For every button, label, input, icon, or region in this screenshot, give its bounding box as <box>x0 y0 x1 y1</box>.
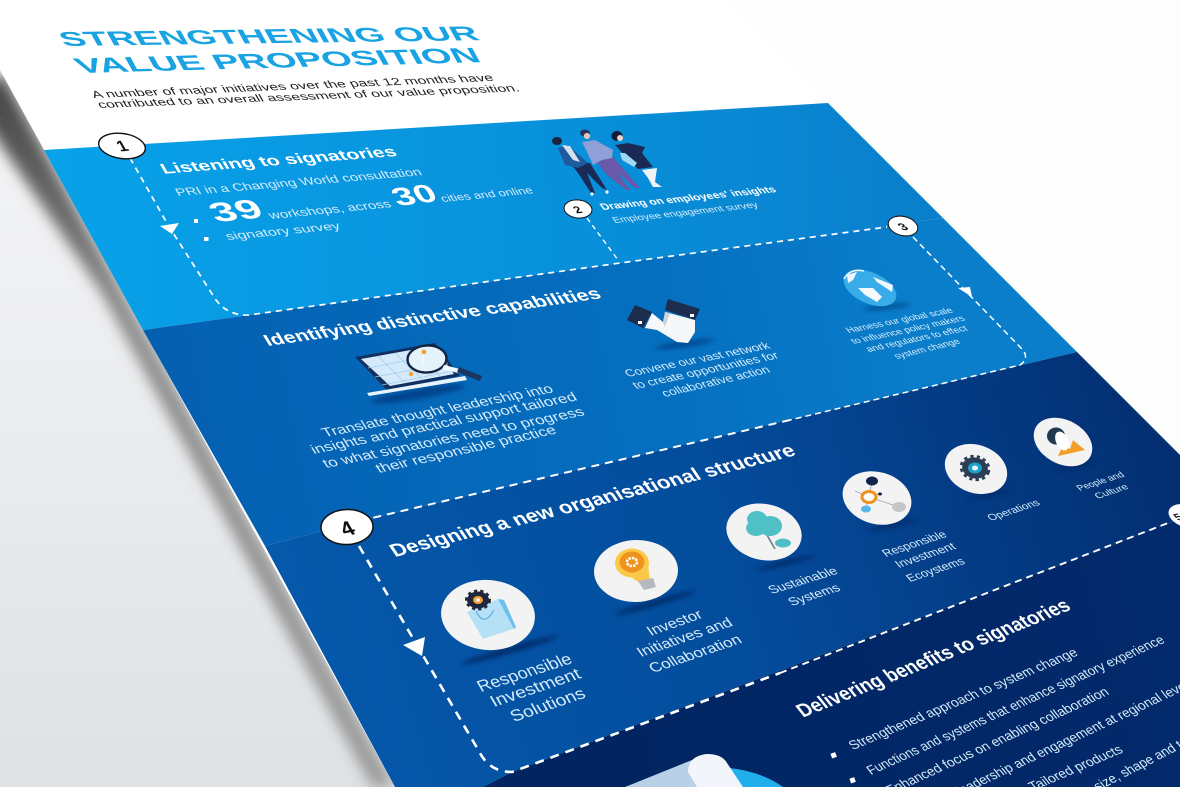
icon: globe <box>838 262 911 314</box>
unit: sustainable systems: Systems <box>785 581 844 608</box>
text block: translate thought leadership <box>307 381 587 476</box>
text block: convene our vast network <box>621 339 782 399</box>
icon: handshake <box>627 299 715 351</box>
unit: responsible investment ecosystems: Investment <box>892 540 959 570</box>
dashed connector: step 3 to 4 left <box>372 420 790 518</box>
arrow head 1 <box>160 223 179 234</box>
unit: sustainable systems: Sustainable <box>765 564 841 596</box>
title <box>54 22 485 78</box>
band: navy organisational structure panel <box>265 352 1180 787</box>
intro text: contributed to an overall assessment of our value proposition. <box>96 83 522 111</box>
unit: people and culture: People and <box>1074 471 1127 493</box>
step badge 1 <box>97 130 147 162</box>
band: mid blue capabilities panel <box>143 218 1077 546</box>
unit: people and culture <box>1025 408 1132 501</box>
text block: translate thought leadership: their responsible practice <box>372 422 559 476</box>
text block: delivering benefits to signatories: Strengthened approach to system change <box>845 645 1081 752</box>
unit: responsible investment solutions <box>438 576 589 725</box>
text block: listening to signatories: Listening to signatories <box>157 144 400 177</box>
unit: responsible investment ecosystems <box>836 463 968 584</box>
dashed connector: step 4 to 5 <box>780 523 1168 673</box>
band: light blue listening panel <box>44 103 943 330</box>
text block: delivering benefits to signatories: Delivering benefits to signatories <box>792 595 1075 722</box>
text block: convene our vast network: collaborative action <box>658 363 773 399</box>
text block: translate thought leadership: to what signatories need to progress <box>319 404 587 471</box>
unit: investor initiatives and collaboration <box>593 539 745 676</box>
step badge 4: 4 <box>335 516 360 541</box>
text block: translate thought leadership: Translate thought leadership into <box>318 381 556 440</box>
text block: harness our global scale: system change <box>892 337 964 361</box>
step badge 3: 3 <box>894 221 912 233</box>
text block: harness our global scale: Harness our global scale <box>844 306 956 335</box>
text block: drawing on employees' insights: Employee engagement survey <box>610 201 761 225</box>
arrow head 4 <box>403 637 425 656</box>
text block: drawing on employees' insights: Drawing on employees' insights <box>598 185 779 212</box>
paper drop shadow <box>0 72 395 787</box>
text block: harness our global scale: to influence policy makers <box>849 314 968 346</box>
text block: listening to signatories: PRI in a Changing World consultation <box>173 166 425 199</box>
unit: operations <box>938 436 1043 523</box>
step badge 2: 2 <box>570 204 585 216</box>
intro text: A number of major initiatives over the past 12 months have <box>90 73 496 101</box>
icon: laptop with magnifier <box>355 343 482 407</box>
unit: responsible investment solutions: Investment <box>486 665 585 710</box>
heading: identifying distinctive capabilities: Identifying distinctive capabilities <box>260 284 605 349</box>
unit: responsible investment solutions: Solutions <box>506 684 589 725</box>
text block: listening to signatories: signatory survey <box>223 220 343 243</box>
text block: drawing on employees' insights <box>598 185 779 225</box>
arrow head 3 <box>958 287 972 297</box>
unit: investor initiatives and collaboration: Collaboration <box>645 632 745 676</box>
illustration: three employees <box>552 130 662 196</box>
text block: listening to signatories: 39 <box>203 195 269 228</box>
dashed connector: step 2 <box>587 218 618 260</box>
band: dark navy benefits panel <box>483 519 1180 787</box>
title: VALUE PROPOSITION <box>70 44 485 78</box>
text block: listening to signatories <box>157 144 536 243</box>
text block: listening to signatories: 30 <box>386 179 443 211</box>
text block: harness our global scale: and regulators to effect <box>864 324 971 354</box>
text block: listening to signatories: cities and online <box>439 185 536 205</box>
text block: delivering benefits to signatories <box>792 595 1180 787</box>
unit: people and culture: Culture <box>1092 482 1132 501</box>
intro text <box>90 73 522 111</box>
illustration: bottom image cropped <box>625 754 783 787</box>
text block: convene our vast network: Convene our vast network <box>621 339 774 379</box>
unit: responsible investment solutions: Responsible <box>473 650 576 695</box>
dashed connector: step 3 to 4 right <box>790 237 1026 420</box>
text block: convene our vast network: to create opportunities for <box>629 349 782 391</box>
text block: listening to signatories: workshops, across <box>264 197 394 222</box>
unit: operations: Operations <box>985 498 1043 523</box>
unit: investor initiatives and collaboration: Investor <box>643 607 706 639</box>
dashed connector: step 1 to 3 <box>130 158 887 315</box>
text block: harness our global scale <box>844 306 971 361</box>
text block: translate thought leadership: insights and practical support tailored <box>307 389 580 457</box>
heading: designing a new organisational structure: Designing a new organisational structure <box>386 441 800 561</box>
dashed connector: step 4 to bottom <box>359 546 780 772</box>
unit: investor initiatives and collaboration: Initiatives and <box>633 615 736 660</box>
unit: sustainable systems <box>721 497 844 608</box>
step badge 3 <box>886 213 920 239</box>
top right surface <box>725 0 1180 455</box>
step badge 1: 1 <box>113 137 132 155</box>
unit: responsible investment ecosystems: Responsible <box>879 528 950 559</box>
step badge 2 <box>563 199 593 219</box>
step badge 5 <box>1165 500 1180 532</box>
unit: responsible investment ecosystems: Ecoystems <box>903 555 968 584</box>
step badge 4 <box>320 509 374 545</box>
title: STRENGTHENING OUR <box>54 22 484 50</box>
